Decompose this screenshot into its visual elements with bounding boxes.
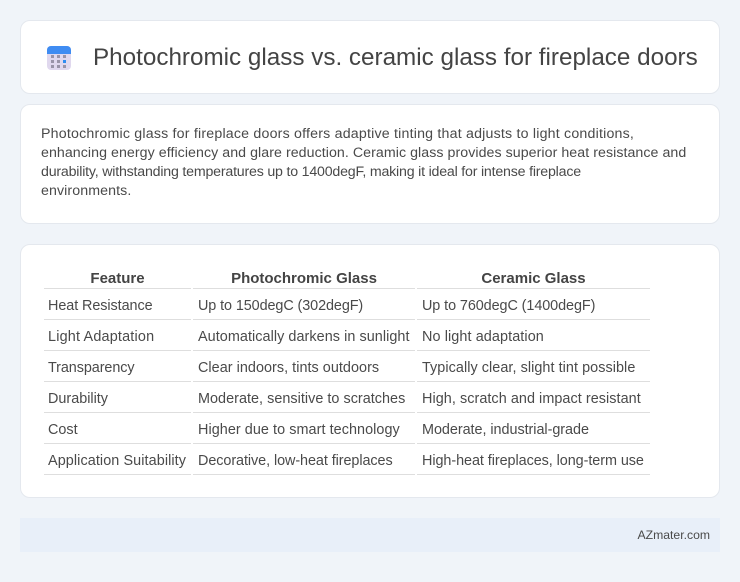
summary text: environments. <box>41 183 131 199</box>
comparison table panel: Clear indoors, tints outdoors <box>198 360 379 376</box>
comparison table panel: Moderate, sensitive to scratches <box>198 391 405 407</box>
footer bar <box>20 518 720 552</box>
summary panel <box>20 104 720 224</box>
row: application suitability: Application Suitability <box>48 453 186 469</box>
comparison table panel: Automatically darkens in sunlight <box>198 329 410 345</box>
footer brand text: AZmater.com <box>638 528 710 542</box>
comparison table panel: Typically clear, slight tint possible <box>422 360 635 376</box>
comparison table panel: High-heat fireplaces, long-term use <box>422 453 644 469</box>
title: Photochromic glass vs. ceramic glass for fireplace doors <box>93 44 698 71</box>
row: transparency: Transparency <box>48 360 134 376</box>
table header: feature: Feature <box>90 270 145 287</box>
summary text <box>41 126 686 199</box>
summary text: durability, withstanding temperatures up to 1400degF, making it ideal for intense fireplace <box>41 164 581 180</box>
comparison table panel: Up to 150degC (302degF) <box>198 298 363 314</box>
comparison table panel: Decorative, low-heat fireplaces <box>198 453 393 469</box>
table header: ceramic glass: Ceramic Glass <box>481 270 586 287</box>
comparison table panel: Higher due to smart technology <box>198 422 400 438</box>
table header: photochromic glass: Photochromic Glass <box>231 270 377 287</box>
row: durability: Durability <box>48 391 108 407</box>
comparison table panel <box>20 244 720 498</box>
comparison table panel: Up to 760degC (1400degF) <box>422 298 595 314</box>
summary text: Photochromic glass for fireplace doors offers adaptive tinting that adjusts to light conditions, <box>41 126 634 142</box>
comparison table panel: No light adaptation <box>422 329 544 345</box>
row: light adaptation: Light Adaptation <box>48 329 154 345</box>
icon: calendar <box>47 46 71 70</box>
comparison table panel: Moderate, industrial-grade <box>422 422 589 438</box>
row: heat resistance: Heat Resistance <box>48 298 153 314</box>
row: cost: Cost <box>48 422 78 438</box>
summary text: enhancing energy efficiency and glare reduction. Ceramic glass provides superior heat resistance and <box>41 145 686 161</box>
comparison table panel: High, scratch and impact resistant <box>422 391 641 407</box>
header panel <box>20 20 720 94</box>
